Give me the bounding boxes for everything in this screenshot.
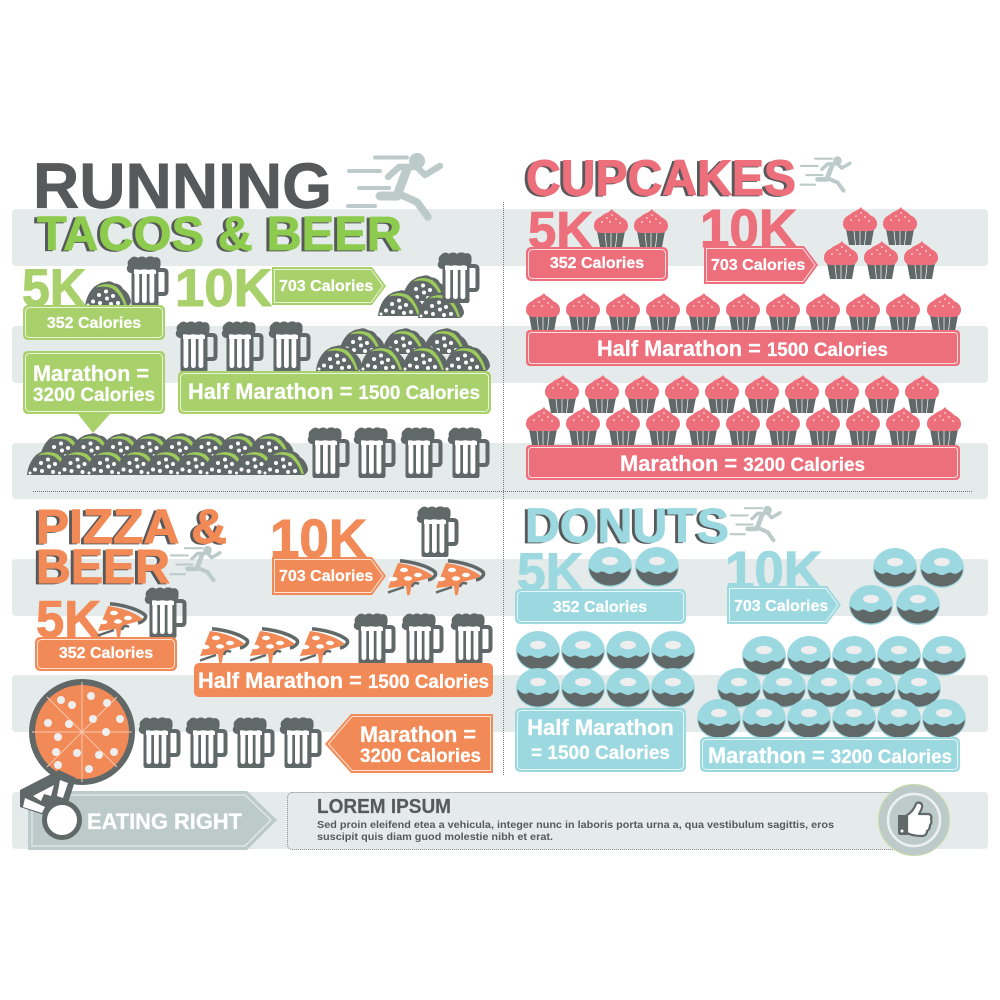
icon: 10K beer	[417, 506, 456, 557]
panel: cupcakes	[523, 150, 961, 480]
callout: 352 calories: 352 Calories	[553, 599, 647, 616]
callout: half marathon: Half Marathon = 1500 Calories	[597, 336, 888, 361]
icons: 10K cupcakes	[824, 207, 938, 279]
heading: pizza and beer: PIZZA &	[36, 501, 227, 554]
icons: 5K donuts	[588, 547, 679, 587]
5K label: 5K	[528, 202, 593, 260]
icons: half marathon donuts	[516, 631, 695, 708]
callout: 352 calories	[526, 247, 668, 281]
icons: marathon beers	[139, 717, 320, 768]
callout: half marathon	[526, 330, 960, 366]
5K label: 5K	[517, 543, 583, 602]
callout: half marathon	[515, 708, 686, 772]
icons: 5K cupcakes	[594, 209, 668, 247]
callout: 352 calories	[35, 637, 177, 671]
icon: large runner	[348, 153, 440, 217]
callout: marathon: Marathon =	[33, 361, 149, 386]
callout: marathon: 3200 Calories	[33, 385, 155, 406]
background bands	[12, 209, 988, 849]
callout: 352 calories: 352 Calories	[59, 645, 153, 662]
callout: 703 calories	[272, 267, 386, 305]
callout: marathon: Marathon =	[360, 722, 476, 747]
heading: pizza and beer: BEER	[33, 542, 167, 595]
panel: donuts	[515, 500, 966, 772]
heading: lorem ipsum: LOREM IPSUM	[317, 796, 451, 818]
icons: half marathon beers	[354, 613, 490, 664]
icon: thumbs up	[878, 784, 950, 856]
callout: marathon: Marathon = 3200 Calories	[708, 743, 952, 768]
heading: tacos and beer: TACOS & BEER	[37, 208, 402, 261]
heading: tacos and beer: TACOS & BEER	[34, 209, 399, 262]
callout: 352 calories	[23, 305, 165, 340]
callout: 703 calories	[272, 557, 386, 595]
body text: Sed proin eleifend etea a vehicula, integer nunc in laboris porta urna a, qua vestibulum sagittis, eros	[317, 819, 834, 831]
icons: half marathon cupcakes	[526, 293, 961, 331]
10K label: 10K	[270, 509, 367, 569]
callout: 352 calories: 352 Calories	[47, 315, 141, 332]
callout: 703 calories: 703 Calories	[734, 598, 828, 615]
body text: suscipit quis diam guod molestie nibh et erat.	[317, 831, 553, 843]
icons: half marathon tacos	[316, 328, 490, 371]
icons: marathon donuts	[697, 636, 966, 739]
icon: 5K beer	[145, 587, 184, 638]
panel: pizza and beer	[32, 501, 493, 782]
icon: 5K beer	[127, 256, 166, 307]
callout: marathon	[526, 445, 960, 480]
body text	[317, 819, 834, 843]
5K label: 5K	[36, 591, 101, 649]
5K label: 5K	[22, 259, 86, 318]
callout: 352 calories: 352 Calories	[550, 255, 644, 272]
icons: marathon tacos	[27, 433, 308, 475]
icons: 10K pizza	[388, 561, 484, 596]
icons: marathon beers	[308, 427, 488, 478]
10K label: 10K	[700, 199, 797, 259]
banner: eating right: EATING RIGHT	[87, 809, 243, 834]
heading: pizza and beer	[33, 501, 227, 595]
icons: half marathon pizza	[200, 629, 348, 664]
banner: eating right	[28, 791, 277, 850]
callout: half marathon: Half Marathon = 1500 Calories	[188, 379, 480, 404]
icon: pizza runner	[171, 546, 220, 580]
icons: marathon cupcakes	[526, 375, 961, 445]
icon: 5K taco	[85, 281, 131, 307]
icon: cupcakes runner	[801, 156, 850, 191]
icons: 10K tacos and beer	[378, 252, 478, 318]
icon: donuts runner	[731, 506, 780, 540]
heading: cupcakes: CUPCAKES	[526, 150, 796, 206]
heading: pizza and beer: BEER	[36, 541, 170, 594]
callout: half marathon: Half Marathon = 1500 Calories	[198, 668, 489, 693]
callout: 703 calories	[704, 246, 818, 284]
heading: cupcakes: CUPCAKES	[523, 151, 793, 207]
10K label: 10K	[725, 541, 822, 601]
callout: half marathon	[178, 371, 491, 414]
callout: 703 calories	[727, 586, 841, 624]
icon: whole pizza	[32, 682, 132, 782]
callout: marathon: Marathon = 3200 Calories	[620, 451, 865, 476]
callout: 352 calories	[515, 589, 686, 624]
icon: 5K pizza	[98, 604, 146, 638]
callout: marathon: 3200 Calories	[360, 746, 481, 767]
callout: half marathon: = 1500 Calories	[531, 743, 670, 764]
callout: 703 calories: 703 Calories	[279, 568, 373, 585]
callout: 703 calories: 703 Calories	[711, 257, 805, 274]
callout: marathon	[700, 737, 960, 772]
panel: lorem ipsum	[288, 792, 928, 850]
icons: 10K donuts	[849, 548, 964, 625]
10K label: 10K	[175, 259, 272, 318]
panel: tacos and beer	[22, 208, 491, 478]
heading: donuts: DONUTS	[525, 500, 729, 553]
icon: medal ribbon	[20, 770, 80, 838]
callout: half marathon: Half Marathon	[527, 715, 674, 740]
callout: 703 calories: 703 Calories	[279, 278, 373, 295]
heading: pizza and beer: PIZZA &	[33, 502, 224, 555]
icons: half marathon beers	[176, 321, 308, 372]
title: Running: RUNNING	[33, 150, 332, 222]
heading: donuts: DONUTS	[522, 501, 726, 554]
callout: marathon	[23, 351, 165, 433]
callout: marathon	[325, 714, 493, 773]
